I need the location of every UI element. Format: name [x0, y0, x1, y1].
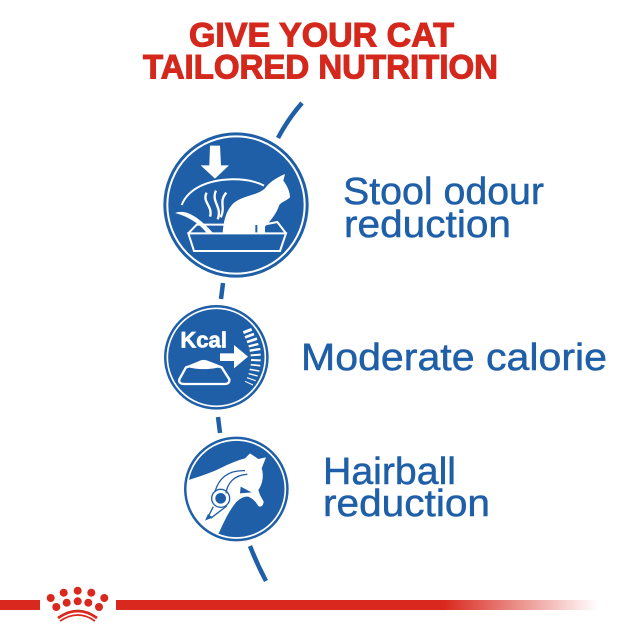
icon: cat grooming: [188, 454, 266, 534]
icon: food bowl: [179, 360, 229, 384]
calorie gauge ticks: [243, 329, 261, 385]
text: moderate calorie: Moderate calorie: [301, 337, 607, 379]
text: hairball reduction: reduction: [323, 483, 490, 525]
icon: litter box with cat: [163, 132, 309, 278]
title: GIVE YOUR CAT: [189, 16, 454, 54]
icon: royal crown logo: [47, 587, 108, 621]
odour dome: [182, 179, 264, 205]
text: hairball reduction: Hairball: [323, 451, 456, 493]
icon: cat silhouette: [223, 174, 290, 234]
footer band right: [116, 600, 598, 610]
Kcal label: Kcal: [180, 328, 227, 353]
icon: hairball reduction: [177, 437, 289, 543]
icon: odour steam: [205, 191, 226, 219]
text: stool odour reduction: [343, 171, 544, 246]
connecting line segments: [218, 103, 302, 581]
text: hairball reduction: [323, 451, 490, 525]
icon: hairball digestive tract: [207, 471, 247, 518]
icon: litter tray: [188, 222, 286, 251]
icon: arrow: [220, 345, 248, 368]
icon: moderate calorie: [164, 305, 269, 410]
icon: down arrow: [201, 146, 229, 179]
title: [143, 16, 498, 86]
title: TAILORED NUTRITION: [143, 48, 498, 86]
footer band left: [0, 600, 40, 610]
text: stool odour reduction: reduction: [344, 204, 511, 246]
text: stool odour reduction: Stool odour: [343, 171, 544, 213]
icon: cat tail: [175, 212, 214, 234]
